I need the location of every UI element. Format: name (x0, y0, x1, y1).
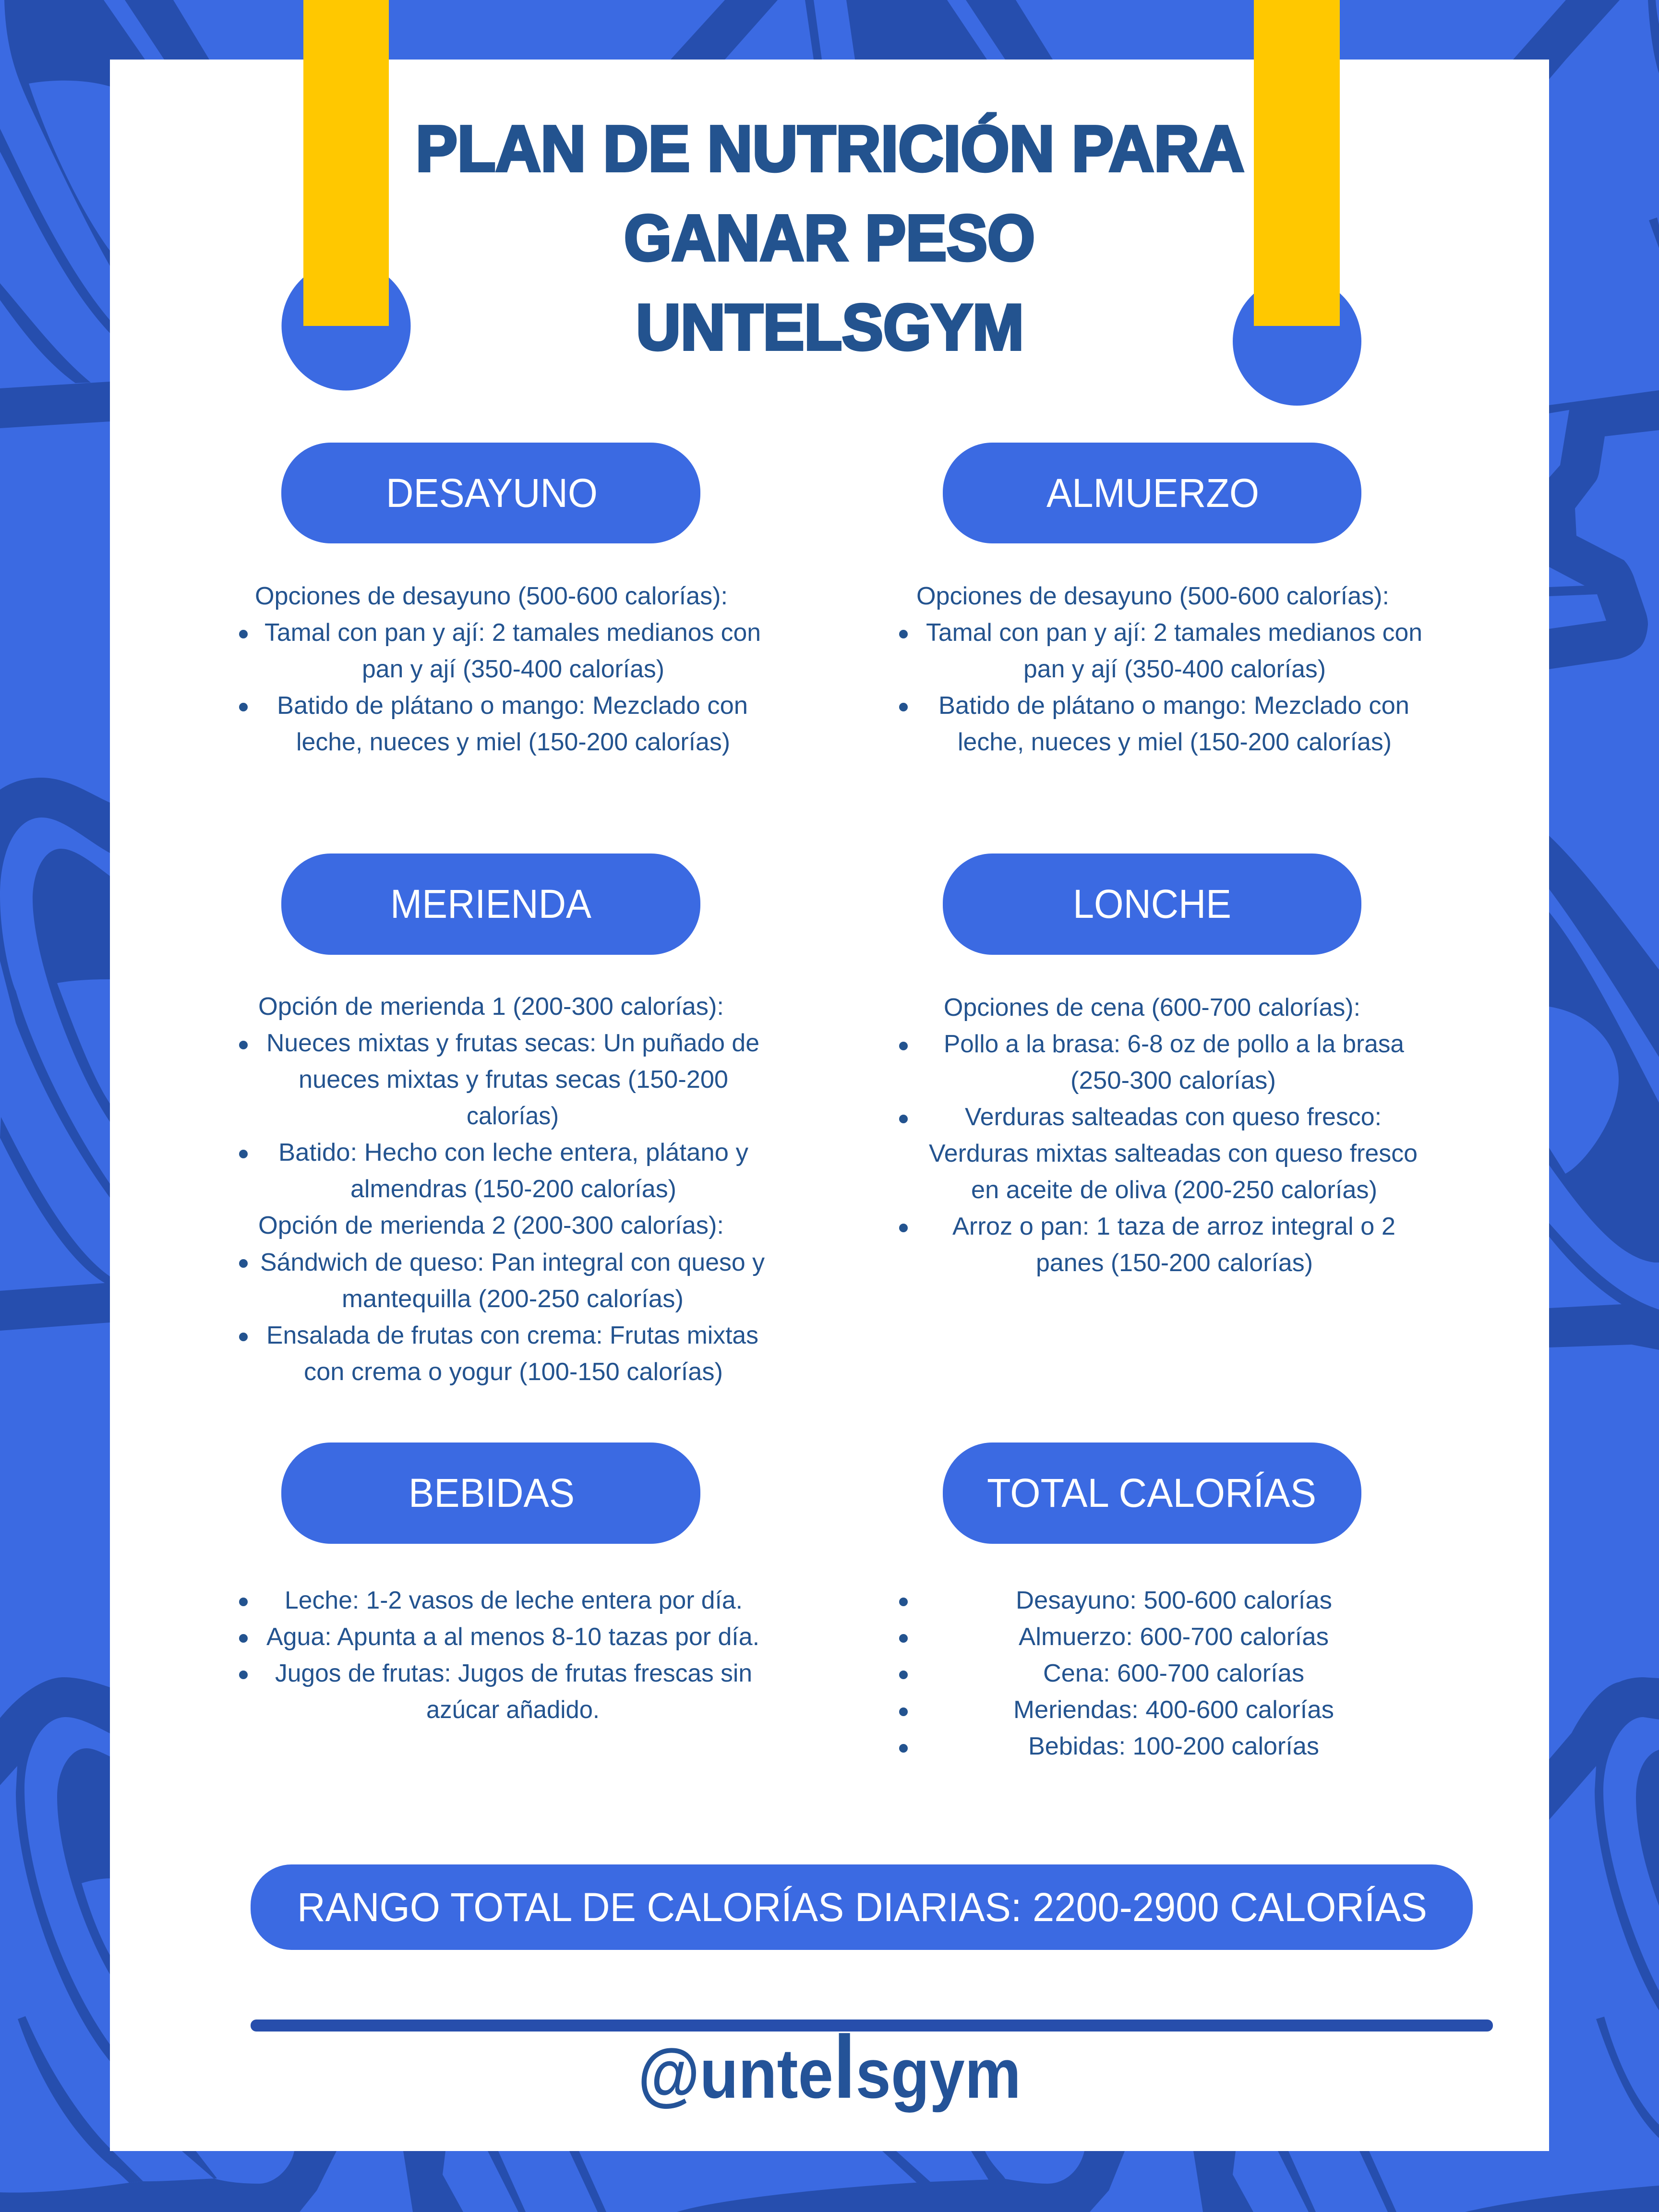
text block: desayuno options: Tamal con pan y ají: 2 tamales medianos con (264, 619, 761, 647)
callout: daily total range (251, 1864, 1473, 1950)
text block: total calorias list (899, 1587, 1334, 1760)
panel: bebidas header (281, 1443, 700, 1544)
panel: total calorias header: TOTAL CALORÍAS (987, 1470, 1316, 1515)
text block: almuerzo options: leche, nueces y miel (150-200 calorías) (958, 728, 1392, 756)
text block: bebidas list: Jugos de frutas: Jugos de frutas frescas sin (275, 1659, 752, 1687)
text block: total calorias list: Desayuno: 500-600 calorías (1016, 1587, 1332, 1614)
text block: merienda options: con crema o yogur (100-150 calorías) (304, 1358, 723, 1386)
text block: almuerzo options (899, 582, 1422, 756)
text block: desayuno options: Batido de plátano o mango: Mezclado con (277, 692, 748, 720)
text block: bebidas list (239, 1587, 759, 1724)
footer rule (251, 2020, 1493, 2032)
text block: lonche options: Verduras salteadas con queso fresco: (965, 1103, 1382, 1131)
text block: merienda options: nueces mixtas y frutas secas (150-200 (299, 1066, 728, 1094)
text block: merienda options: almendras (150-200 calorías) (350, 1175, 676, 1203)
text block: lonche options: en aceite de oliva (200-250 calorías) (971, 1176, 1377, 1204)
text block: lonche options: Pollo a la brasa: 6-8 oz de pollo a la brasa (944, 1030, 1404, 1058)
icon: left pin circle (281, 261, 411, 391)
text block: desayuno options: leche, nueces y miel (150-200 calorías) (296, 728, 730, 756)
text block: merienda options: Opción de merienda 2 (200-300 calorías): (258, 1212, 724, 1239)
text block: total calorias list: Meriendas: 400-600 calorías (1013, 1696, 1334, 1724)
text block: merienda options (239, 993, 765, 1386)
text block: almuerzo options: Batido de plátano o mango: Mezclado con (938, 692, 1409, 720)
text block: merienda options: Ensalada de frutas con crema: Frutas mixtas (266, 1322, 758, 1349)
panel: merienda header (281, 854, 700, 955)
text block: lonche options (899, 994, 1418, 1277)
icon: right pin circle (1233, 277, 1361, 406)
text block: lonche options: (250-300 calorías) (1070, 1067, 1276, 1094)
text block: lonche options: panes (150-200 calorías) (1036, 1249, 1313, 1277)
text block: merienda options: Opción de merienda 1 (200-300 calorías): (258, 993, 724, 1021)
text block: merienda options: Nueces mixtas y frutas secas: Un puñado de (266, 1029, 759, 1057)
text block: desayuno options: pan y ají (350-400 calorías) (362, 655, 664, 683)
panel: lonche header: LONCHE (1073, 881, 1231, 926)
text block: almuerzo options: Opciones de desayuno (500-600 calorías): (916, 582, 1389, 610)
left yellow strip (303, 0, 389, 326)
panel: desayuno header (281, 443, 700, 543)
text block: desayuno options (239, 582, 761, 756)
right yellow strip (1254, 0, 1340, 326)
text block: lonche options: Arroz o pan: 1 taza de arroz integral o 2 (952, 1213, 1395, 1240)
text block: merienda options: mantequilla (200-250 calorías) (342, 1285, 684, 1313)
text block: total calorias list: Cena: 600-700 calorías (1043, 1659, 1304, 1687)
text block: bebidas list: azúcar añadido. (426, 1696, 600, 1724)
panel: bebidas header: BEBIDAS (409, 1470, 575, 1515)
text block: bebidas list: Leche: 1-2 vasos de leche entera por día. (285, 1587, 743, 1614)
text block: total calorias list: Bebidas: 100-200 calorías (1028, 1732, 1319, 1760)
text block: lonche options: Opciones de cena (600-700 calorías): (944, 994, 1360, 1022)
title: UNTELSGYM (636, 291, 1024, 363)
callout: daily total range: RANGO TOTAL DE CALORÍAS DIARIAS: 2200-2900 CALORÍAS (297, 1885, 1427, 1930)
panel: desayuno header: DESAYUNO (386, 470, 598, 516)
text block: bebidas list: Agua: Apunta a al menos 8-10 tazas por día. (266, 1623, 759, 1651)
panel: almuerzo header: ALMUERZO (1046, 470, 1259, 516)
text block: merienda options: Sándwich de queso: Pan integral con queso y (260, 1249, 765, 1276)
panel: merienda header: MERIENDA (390, 881, 591, 926)
text block: merienda options: Batido: Hecho con leche entera, plátano y (278, 1139, 748, 1166)
panel: almuerzo header (943, 443, 1361, 543)
text block: lonche options: Verduras mixtas salteadas con queso fresco (929, 1140, 1418, 1167)
text block: almuerzo options: pan y ají (350-400 calorías) (1023, 655, 1326, 683)
text block: almuerzo options: Tamal con pan y ají: 2 tamales medianos con (926, 619, 1422, 647)
text block: total calorias list: Almuerzo: 600-700 calorías (1019, 1623, 1329, 1651)
panel: lonche header (943, 854, 1361, 955)
footer handle: @untelsgym (638, 2018, 1021, 2117)
panel: total calorias header (943, 1443, 1361, 1544)
title: PLAN DE NUTRICIÓN PARA (416, 112, 1244, 185)
text block: merienda options: calorías) (467, 1102, 559, 1130)
title: GANAR PESO (624, 202, 1035, 274)
title (416, 112, 1244, 363)
text block: desayuno options: Opciones de desayuno (500-600 calorías): (255, 582, 728, 610)
